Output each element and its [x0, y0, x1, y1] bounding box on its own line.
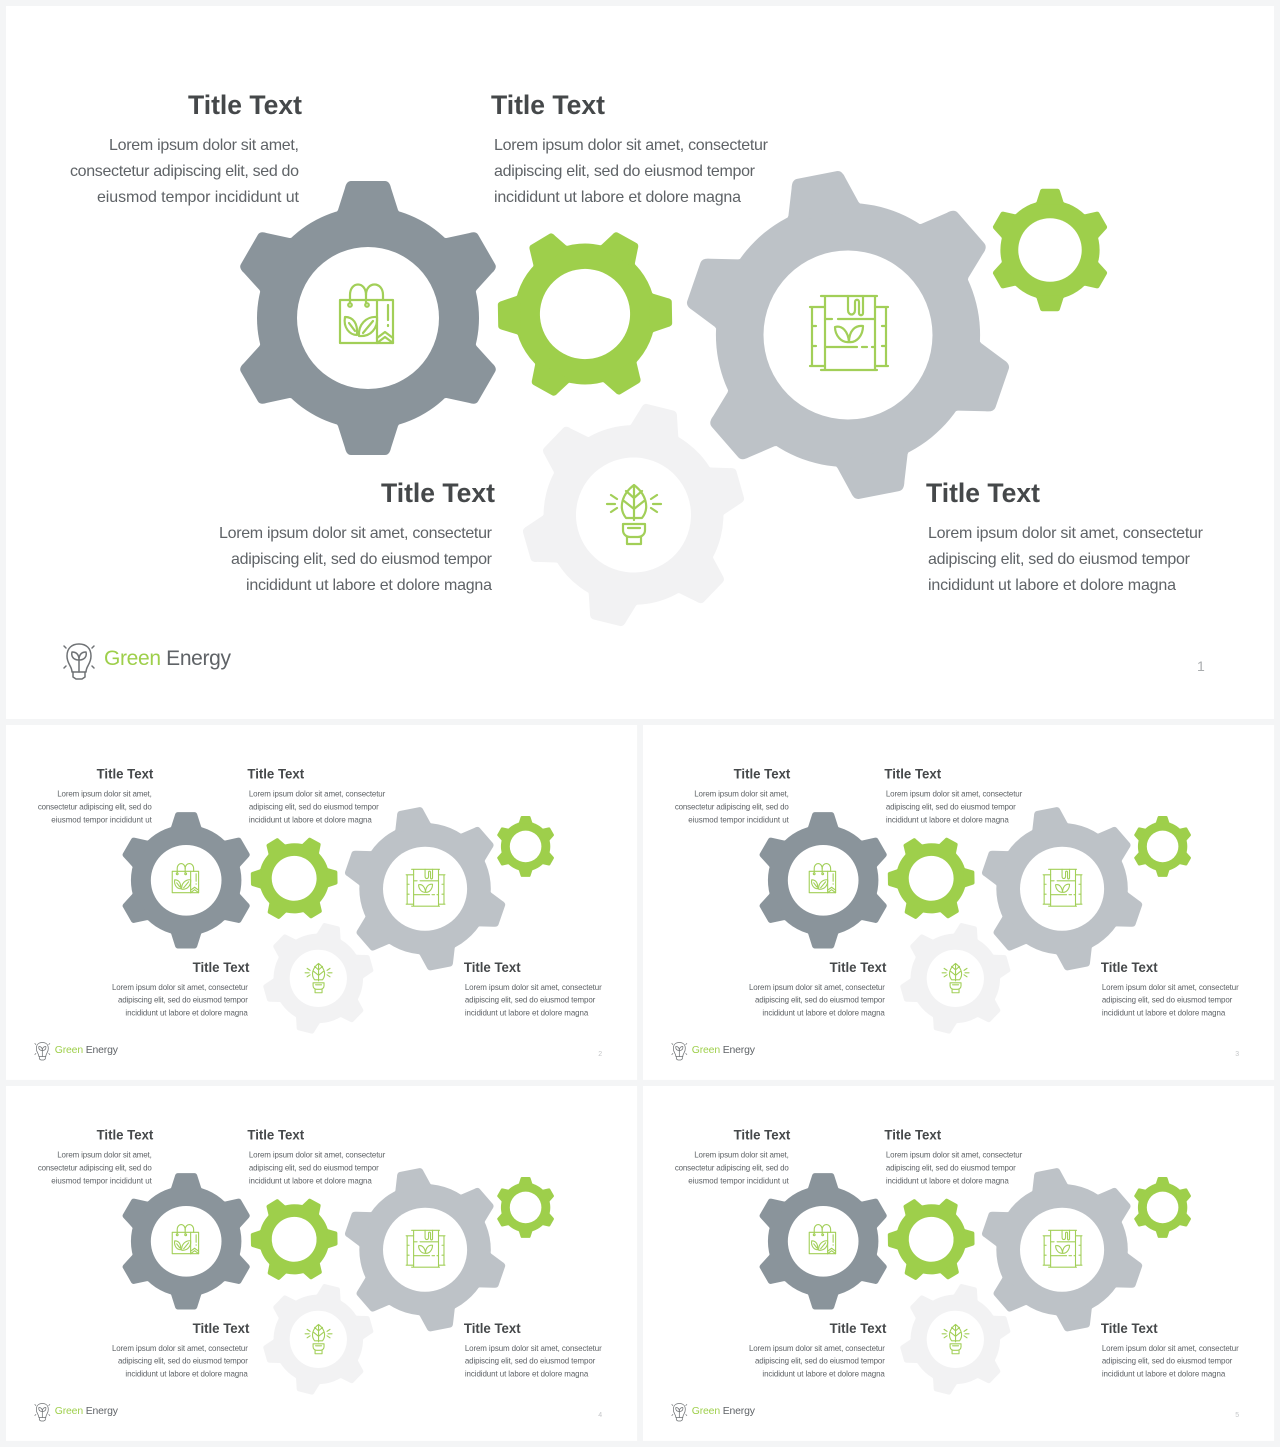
- panel: thumbnail slide 4: incididunt ut labore et dolore magna: [465, 1370, 589, 1379]
- text block: bottom left: [219, 525, 493, 594]
- heading: top centre title: Title Text: [491, 90, 605, 120]
- panel: thumbnail slide 3: Lorem ipsum dolor sit amet, consectetur: [1102, 983, 1239, 992]
- panel: thumbnail slide 2: Lorem ipsum dolor sit amet, consectetur: [465, 983, 602, 992]
- logo text: Green Energy: [104, 647, 232, 670]
- panel: thumbnail slide 5: adipiscing elit, sed do eiusmod tempor: [755, 1357, 885, 1366]
- panel: thumbnail slide 4: adipiscing elit, sed do eiusmod tempor: [249, 1164, 379, 1173]
- panel: thumbnail slide 3: Lorem ipsum dolor sit amet, consectetur: [886, 790, 1023, 799]
- heading: bottom left title: Title Text: [381, 478, 495, 508]
- text block: bottom left: adipiscing elit, sed do eiusmod tempor: [231, 551, 493, 568]
- panel: thumbnail slide 5: Green Energy: [692, 1406, 756, 1417]
- panel: thumbnail slide 4: Title Text: [247, 1128, 305, 1143]
- panel: thumbnail slide 5: incididunt ut labore et dolore magna: [1102, 1370, 1226, 1379]
- panel: thumbnail slide 4: Lorem ipsum dolor sit amet, consectetur: [249, 1151, 386, 1160]
- panel: thumbnail slide 5: Title Text: [734, 1128, 791, 1143]
- text block: top centre: adipiscing elit, sed do eiusmod tempor: [494, 163, 756, 180]
- panel: thumbnail slide 3: [643, 725, 1274, 1080]
- panel: thumbnail slide 2: adipiscing elit, sed do eiusmod tempor: [249, 803, 379, 812]
- panel: thumbnail slide 3: incididunt ut labore et dolore magna: [886, 816, 1009, 825]
- panel: thumbnail slide 2: eiusmod tempor incididunt ut: [51, 816, 153, 825]
- panel: thumbnail slide 3: adipiscing elit, sed do eiusmod tempor: [886, 803, 1016, 812]
- panel: thumbnail slide 3: Title Text: [830, 960, 887, 975]
- panel: thumbnail slide 3: incididunt ut labore et dolore magna: [762, 1009, 885, 1018]
- panel: thumbnail slide 5: eiusmod tempor incididunt ut: [688, 1177, 790, 1186]
- panel: thumbnail slide 2: Title Text: [464, 960, 521, 975]
- panel: thumbnail slide 4: Title Text: [97, 1128, 154, 1143]
- panel: thumbnail slide 4: Green Energy: [55, 1406, 119, 1417]
- text block: top left: [70, 137, 300, 206]
- text block: bottom left: Lorem ipsum dolor sit amet, consectetur: [219, 525, 493, 542]
- panel: thumbnail slide 3: adipiscing elit, sed do eiusmod tempor: [1102, 996, 1233, 1005]
- text block: top left: consectetur adipiscing elit, sed do: [70, 163, 299, 180]
- panel: thumbnail slide 4: 4: [598, 1412, 602, 1419]
- page number: 1: [1197, 658, 1205, 674]
- panel: thumbnail slide 5: Lorem ipsum dolor sit amet, consectetur: [886, 1151, 1023, 1160]
- panel: thumbnail slide 3: Lorem ipsum dolor sit amet, consectetur: [749, 983, 885, 992]
- icon: barrels: [810, 296, 888, 370]
- panel: thumbnail slide 3: eiusmod tempor incididunt ut: [688, 816, 790, 825]
- panel: thumbnail slide 3: Title Text: [1101, 960, 1158, 975]
- gear: dark grey, left: [231, 181, 505, 455]
- panel: thumbnail slide 4: adipiscing elit, sed do eiusmod tempor: [465, 1357, 596, 1366]
- panel: thumbnail slide 5: incididunt ut labore et dolore magna: [886, 1177, 1009, 1186]
- panel: thumbnail slide 3: consectetur adipiscing elit, sed do: [675, 803, 789, 812]
- panel: thumbnail slide 4: consectetur adipiscing elit, sed do: [38, 1164, 152, 1173]
- panel: thumbnail slide 5: Lorem ipsum dolor sit amet, consectetur: [749, 1344, 885, 1353]
- gear: light, bottom centre: [499, 380, 768, 650]
- panel: thumbnail slide 4: incididunt ut labore et dolore magna: [249, 1177, 372, 1186]
- panel: thumbnail slide 3: Lorem ipsum dolor sit amet,: [694, 790, 789, 799]
- panel: thumbnail slide 4: Lorem ipsum dolor sit amet, consectetur: [465, 1344, 602, 1353]
- panel: thumbnail slide 3: 3: [1235, 1051, 1239, 1058]
- icon: shopping bag: [340, 284, 393, 343]
- panel: thumbnail slide 3: adipiscing elit, sed do eiusmod tempor: [755, 996, 885, 1005]
- panel: thumbnail slide 5: Lorem ipsum dolor sit amet,: [694, 1151, 789, 1160]
- panel: thumbnail slide 5: Title Text: [884, 1128, 942, 1143]
- text block: top centre: Lorem ipsum dolor sit amet, consectetur: [494, 137, 769, 154]
- icon: logo bulb: [64, 644, 94, 679]
- panel: thumbnail slide 2: [6, 725, 637, 1080]
- gear: green, centre: [467, 196, 703, 432]
- panel: thumbnail slide 4: adipiscing elit, sed do eiusmod tempor: [118, 1357, 248, 1366]
- panel: thumbnail slide 2: incididunt ut labore et dolore magna: [125, 1009, 248, 1018]
- gear: green, small: [989, 189, 1111, 311]
- panel: thumbnail slide 2: adipiscing elit, sed do eiusmod tempor: [118, 996, 248, 1005]
- panel: thumbnail slide 3: Title Text: [734, 767, 791, 782]
- panel: thumbnail slide 5: [643, 1086, 1274, 1441]
- panel: thumbnail slide 2: Title Text: [97, 767, 154, 782]
- panel: thumbnail slide 2: Lorem ipsum dolor sit amet,: [57, 790, 152, 799]
- panel: thumbnail slide 5: incididunt ut labore et dolore magna: [762, 1370, 885, 1379]
- panel: main slide: [6, 6, 1274, 719]
- panel: thumbnail slide 4: Lorem ipsum dolor sit amet,: [57, 1151, 152, 1160]
- panel: thumbnail slide 4: [6, 1086, 637, 1441]
- text block: bottom right: incididunt ut labore et dolore magna: [928, 577, 1176, 594]
- panel: thumbnail slide 5: consectetur adipiscing elit, sed do: [675, 1164, 789, 1173]
- panel: thumbnail slide 2: Green Energy: [55, 1045, 119, 1056]
- panel: thumbnail slide 5: Title Text: [830, 1321, 887, 1336]
- text block: top left: eiusmod tempor incididunt ut: [97, 189, 300, 206]
- icon: plant bulb: [607, 485, 661, 544]
- panel: thumbnail slide 3: Title Text: [884, 767, 942, 782]
- panel: thumbnail slide 2: incididunt ut labore et dolore magna: [249, 816, 372, 825]
- panel: thumbnail slide 4: eiusmod tempor incididunt ut: [51, 1177, 153, 1186]
- panel: thumbnail slide 4: Title Text: [464, 1321, 521, 1336]
- panel: thumbnail slide 3: incididunt ut labore et dolore magna: [1102, 1009, 1226, 1018]
- panel: thumbnail slide 5: Title Text: [1101, 1321, 1158, 1336]
- panel: thumbnail slide 2: Title Text: [193, 960, 250, 975]
- panel: thumbnail slide 2: incididunt ut labore et dolore magna: [465, 1009, 589, 1018]
- panel: thumbnail slide 5: 5: [1235, 1412, 1239, 1419]
- panel: thumbnail slide 4: incididunt ut labore et dolore magna: [125, 1370, 248, 1379]
- panel: thumbnail slide 4: Lorem ipsum dolor sit amet, consectetur: [112, 1344, 248, 1353]
- panel: thumbnail slide 2: Lorem ipsum dolor sit amet, consectetur: [112, 983, 248, 992]
- panel: thumbnail slide 2: 2: [598, 1051, 602, 1058]
- heading: top left title: Title Text: [188, 90, 302, 120]
- panel: thumbnail slide 2: Lorem ipsum dolor sit amet, consectetur: [249, 790, 386, 799]
- text block: top centre: incididunt ut labore et dolore magna: [494, 189, 741, 206]
- text block: top centre: [494, 137, 769, 206]
- text block: bottom right: Lorem ipsum dolor sit amet, consectetur: [928, 525, 1204, 542]
- text block: bottom left: incididunt ut labore et dolore magna: [246, 577, 492, 594]
- panel: thumbnail slide 2: consectetur adipiscing elit, sed do: [38, 803, 152, 812]
- panel: thumbnail slide 2: adipiscing elit, sed do eiusmod tempor: [465, 996, 596, 1005]
- heading: bottom right title: Title Text: [926, 478, 1040, 508]
- panel: thumbnail slide 5: adipiscing elit, sed do eiusmod tempor: [1102, 1357, 1233, 1366]
- panel: thumbnail slide 4: Title Text: [193, 1321, 250, 1336]
- text block: top left: Lorem ipsum dolor sit amet,: [109, 137, 299, 154]
- text block: bottom right: adipiscing elit, sed do eiusmod tempor: [928, 551, 1191, 568]
- panel: thumbnail slide 5: Lorem ipsum dolor sit amet, consectetur: [1102, 1344, 1239, 1353]
- panel: thumbnail slide 2: Title Text: [247, 767, 305, 782]
- panel: thumbnail slide 3: Green Energy: [692, 1045, 756, 1056]
- text block: bottom right: [928, 525, 1204, 594]
- panel: thumbnail slide 5: adipiscing elit, sed do eiusmod tempor: [886, 1164, 1016, 1173]
- gear: mid grey, large: [657, 144, 1039, 526]
